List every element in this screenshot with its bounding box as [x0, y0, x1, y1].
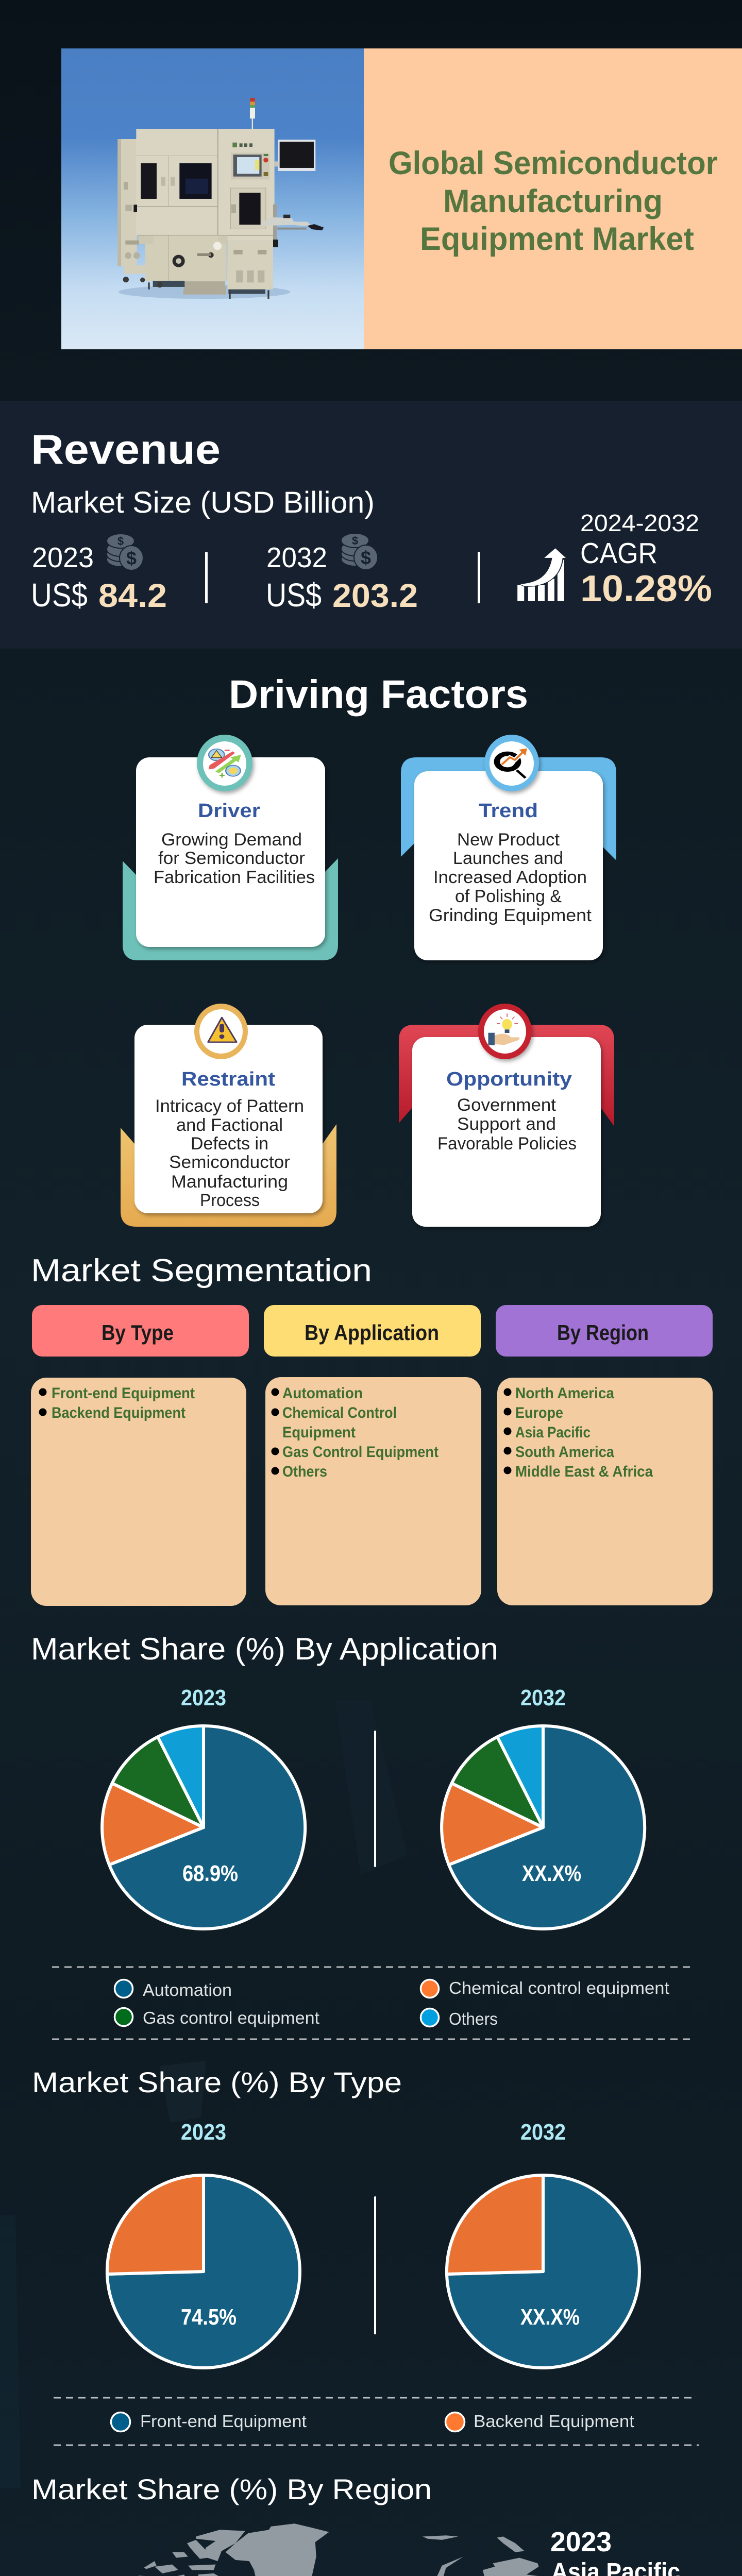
badge: driver icon: [197, 735, 252, 791]
icon: coins 2032: $: [361, 547, 371, 568]
text: driver: for Semiconductor: [158, 849, 305, 868]
revenue heading: Revenue: [31, 427, 221, 473]
panel: restraint: [121, 1004, 336, 1227]
hero image: semiconductor machine: [61, 48, 364, 349]
pie chart: type 2032: [447, 2175, 639, 2368]
CAGR: 10.28%: [580, 568, 712, 609]
list: region: [504, 1385, 653, 1480]
2032 value: 203.2: [332, 577, 418, 614]
text: restraint: Intricacy of Pattern: [155, 1096, 304, 1116]
callout: asia pacific share: [550, 2527, 680, 2576]
list: application: [271, 1385, 439, 1480]
text: driver: [154, 830, 315, 887]
heading: share by application: Market Share (%) By Application: [31, 1632, 498, 1666]
segment: by type: [31, 1305, 249, 1606]
heading: market segmentation: Market Segmentation: [31, 1253, 372, 1289]
segment: by region: By Region: [557, 1320, 649, 1345]
text: trend: Increased Adoption: [433, 868, 587, 887]
segment: by application: [264, 1305, 481, 1605]
title: Manufacturing: [443, 183, 663, 219]
map: eurasia africa oceania: [320, 2535, 667, 2576]
icon: coins 2023: [107, 534, 143, 570]
panel: trend: [401, 735, 616, 960]
segment: by type: By Type: [102, 1320, 174, 1345]
icon: coins 2023: $: [126, 548, 137, 569]
divider: [374, 2196, 376, 2334]
divider: [478, 552, 480, 603]
panel: revenue: [0, 401, 742, 649]
year label 2023: 2023: [181, 2120, 226, 2145]
icon: coins 2023: $: [117, 535, 124, 548]
market size label: Market Size (USD Billion): [31, 486, 375, 519]
2023 value: [31, 541, 167, 614]
text: opportunity: Favorable Policies: [437, 1134, 577, 1154]
icon: coins 2032: [341, 533, 378, 570]
text: opportunity: Government: [457, 1095, 556, 1115]
legend: application: Gas control equipment: [143, 2008, 319, 2027]
heading: opportunity: Opportunity: [446, 1069, 572, 1090]
list: region: Middle East & Africa: [515, 1463, 653, 1480]
list: application: Automation: [282, 1385, 363, 1402]
badge: trend icon: [484, 735, 539, 791]
title: Global Semiconductor: [389, 145, 718, 181]
text: driver: Growing Demand: [161, 830, 302, 850]
icon: growth arrow: [517, 548, 567, 601]
text: opportunity: [437, 1095, 577, 1154]
text: trend: [429, 830, 592, 925]
divider: [374, 1731, 376, 1867]
2023 value: 84.2: [98, 577, 167, 614]
legend: type: Backend Equipment: [474, 2412, 634, 2431]
hero panel: [61, 48, 742, 349]
legend: application: Automation: [143, 1980, 232, 1999]
driving factors heading: Driving Factors: [229, 672, 528, 717]
list: type: Front-end Equipment: [52, 1385, 195, 1402]
list: application: Equipment: [282, 1424, 356, 1441]
year label 2023: 2023: [181, 1685, 226, 1710]
2032 value: [266, 541, 418, 614]
world map: [71, 2523, 667, 2576]
list: region: South America: [515, 1444, 614, 1461]
heading: share by region: Market Share (%) By Region: [31, 2473, 432, 2505]
year label 2032: 2032: [520, 1685, 566, 1710]
list: application: Others: [282, 1463, 327, 1480]
pie chart: application 2023: 68.9%: [182, 1861, 238, 1886]
legend: type: [54, 2398, 699, 2445]
text: driver: Fabrication Facilities: [154, 868, 315, 887]
text: opportunity: Support and: [457, 1114, 556, 1134]
CAGR: [580, 510, 712, 609]
text: trend: Launches and: [453, 849, 563, 868]
text: trend: of Polishing &: [455, 887, 562, 906]
list: application: Gas Control Equipment: [282, 1444, 439, 1461]
title: Equipment Market: [420, 221, 694, 257]
panel: opportunity: [399, 1004, 614, 1227]
legend: application: Others: [449, 2009, 498, 2028]
list: region: Asia Pacific: [515, 1424, 591, 1441]
legend: application: Chemical control equipment: [449, 1978, 669, 1997]
peach title panel: [364, 48, 742, 349]
list: type: Backend Equipment: [52, 1404, 185, 1421]
2032 value: 2032: [266, 541, 327, 573]
2032 value: US$: [266, 577, 322, 614]
title: [389, 145, 718, 257]
heading: restraint: Restraint: [181, 1069, 275, 1090]
pie chart: type 2023: [107, 2175, 300, 2368]
text: restraint: Semiconductor: [169, 1153, 290, 1172]
pie chart: application 2032: XX.X%: [522, 1861, 581, 1886]
panel: driver: [123, 735, 338, 960]
2023 value: 2023: [32, 541, 94, 573]
pie chart: type 2023: 74.5%: [181, 2304, 237, 2330]
pie chart: application 2023: [102, 1726, 305, 1929]
heading: driver: Driver: [198, 800, 260, 822]
pie chart: application 2032: [442, 1726, 645, 1929]
text: restraint: and Factional: [176, 1115, 283, 1135]
legend: application: [52, 1967, 695, 2039]
list: region: Europe: [515, 1404, 563, 1421]
2023 value: US$: [31, 577, 88, 614]
list: application: Chemical Control: [282, 1404, 397, 1421]
CAGR: 2024-2032: [580, 510, 699, 536]
heading: share by type: Market Share (%) By Type: [32, 2066, 402, 2098]
text: restraint: [155, 1096, 304, 1210]
pie chart: type 2032: XX.X%: [520, 2304, 580, 2330]
text: trend: Grinding Equipment: [429, 906, 592, 925]
text: restraint: Manufacturing: [171, 1172, 288, 1192]
text: trend: New Product: [457, 830, 560, 850]
CAGR: CAGR: [580, 537, 657, 570]
badge: opportunity icon: [478, 1004, 532, 1059]
segment: by region: [496, 1305, 713, 1605]
list: type: [39, 1385, 195, 1421]
map: americas: [71, 2523, 329, 2576]
year label 2032: 2032: [520, 2120, 566, 2145]
heading: trend: Trend: [479, 800, 538, 822]
text: restraint: Process: [200, 1191, 260, 1210]
icon: coins 2032: $: [352, 534, 358, 547]
badge: restraint icon: [194, 1004, 248, 1059]
callout: asia pacific share: 2023: [550, 2527, 612, 2557]
list: region: North America: [515, 1385, 614, 1402]
text: restraint: Defects in: [191, 1134, 268, 1154]
legend: type: Front-end Equipment: [140, 2412, 307, 2431]
segment: by application: By Application: [305, 1320, 439, 1345]
divider: [205, 552, 208, 603]
